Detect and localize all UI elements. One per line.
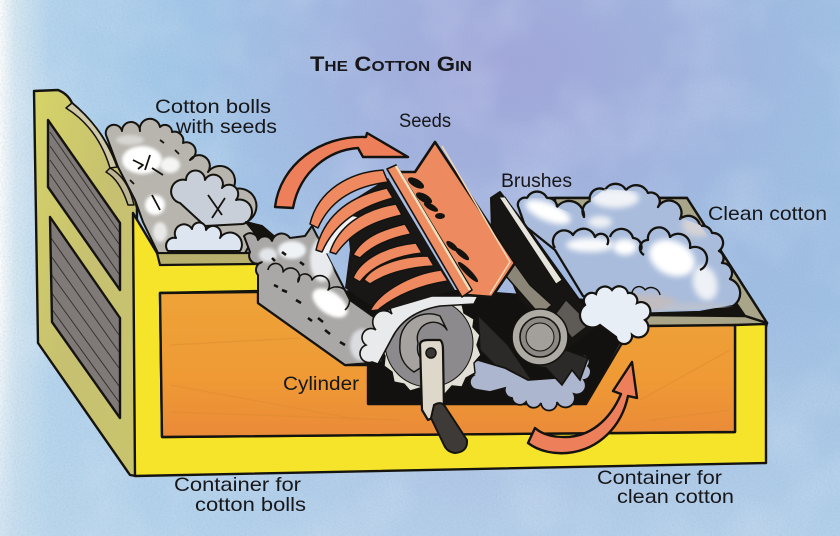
orange wood panel xyxy=(160,292,735,437)
brush roller bar xyxy=(478,192,598,392)
machine well: dark cutaway xyxy=(258,290,622,404)
label: container for clean cotton: Container for xyxy=(597,467,723,489)
label: container for cotton bolls: cotton bolls xyxy=(195,494,306,516)
title: The Cotton Gin xyxy=(310,53,472,76)
seeds arrow xyxy=(275,133,408,208)
small clean cotton puff xyxy=(580,286,650,344)
yellow front frame xyxy=(133,213,766,476)
front strip xyxy=(387,165,472,297)
lower vent xyxy=(50,217,120,418)
cotton moving into cylinder xyxy=(244,222,385,365)
label: container for cotton bolls xyxy=(174,474,306,516)
seeds on chute xyxy=(406,175,480,284)
cylinder saw disk xyxy=(380,294,481,394)
clean cotton pile xyxy=(518,184,740,314)
label: cylinder: Cylinder xyxy=(283,373,360,395)
label: seeds: Seeds xyxy=(399,110,451,132)
left end panel xyxy=(34,90,137,476)
label: container for cotton bolls: Container for xyxy=(174,474,302,496)
cotton under brushes xyxy=(470,354,591,411)
back plate xyxy=(396,142,515,297)
olive rim of seed box xyxy=(157,253,258,265)
label: cotton bolls with seeds: with seeds xyxy=(175,116,277,138)
white cotton band over cylinder xyxy=(360,289,478,364)
upper vent xyxy=(48,120,120,290)
crank arm and handle xyxy=(420,340,467,453)
cylinder teeth shadows and ribs xyxy=(310,170,455,312)
clean cotton container rim xyxy=(550,198,767,327)
label: cotton bolls with seeds: Cotton bolls xyxy=(155,96,271,118)
label: container for clean cotton xyxy=(597,467,734,508)
label: brushes: Brushes xyxy=(501,170,572,192)
label: container for clean cotton: clean cotton xyxy=(617,486,734,508)
red seed chute xyxy=(387,142,515,297)
cotton bolls with seeds: hopper pile xyxy=(106,119,256,253)
second brush wheel xyxy=(512,309,588,385)
clean cotton arrow xyxy=(528,362,637,453)
label: cotton bolls with seeds xyxy=(155,96,277,138)
label: clean cotton: Clean cotton xyxy=(708,203,827,225)
